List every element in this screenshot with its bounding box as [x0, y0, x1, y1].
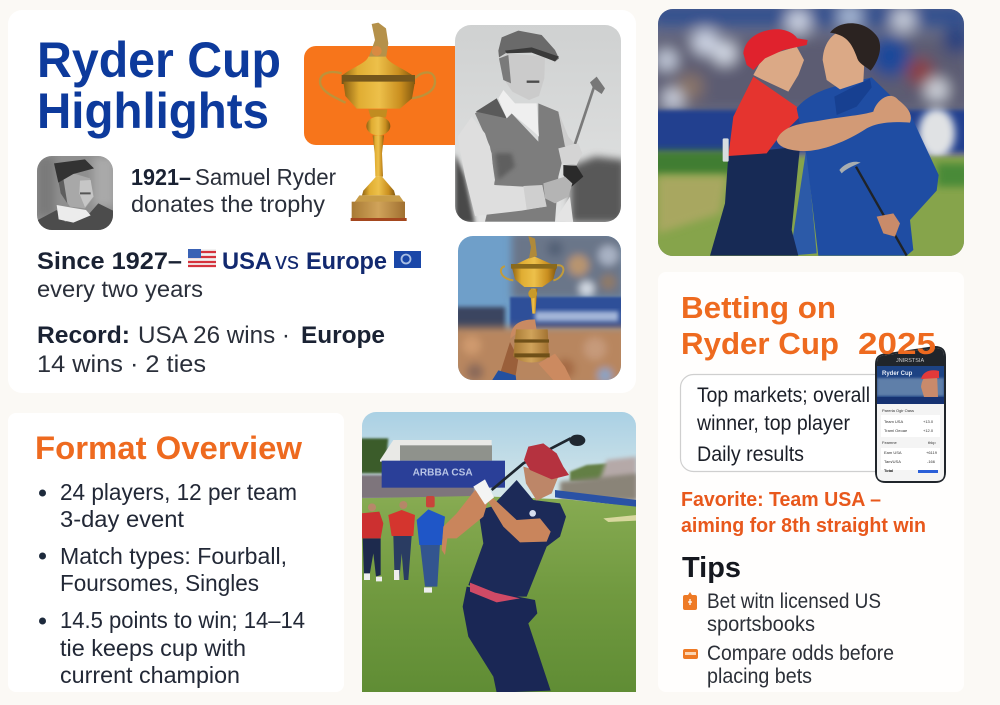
text: tip one: [707, 590, 881, 636]
icon: phone betting app: Ryder Cup: [882, 371, 913, 377]
icon: usa flag: [188, 249, 216, 267]
bullet list: current champion: [60, 662, 240, 688]
text: record: Record:: [37, 322, 130, 349]
icon: phone betting app: +13.0: [923, 419, 934, 424]
bullet list: 24 players, 12 per team: [60, 479, 297, 505]
text: since 1927: USA: [222, 248, 272, 275]
bullet list: Foursomes, Singles: [60, 570, 259, 596]
orange block behind trophy: [304, 46, 456, 145]
text: since 1927: [37, 248, 421, 302]
text: tip two: Compare odds before: [707, 642, 894, 665]
heading: format overview: Format Overview: [35, 430, 302, 466]
icon: phone betting app: Tam/USA: [884, 459, 901, 464]
icon: phone betting app: Total: [884, 468, 893, 473]
box: top markets: winner, top player: [696, 412, 850, 435]
heading: betting on ryder cup: Betting on: [681, 290, 836, 325]
box: top markets: Daily results: [697, 443, 804, 466]
text: favorite: aiming for 8th straight win: [681, 515, 926, 537]
text: since 1927: Since 1927–: [37, 248, 182, 275]
box: top markets: Top markets; overall: [697, 384, 870, 407]
icon: phone betting app: [875, 346, 946, 483]
photo: two golfers embracing: [650, 3, 970, 260]
bullet list: 14.5 points to win; 14–14: [60, 607, 305, 633]
title: [37, 32, 281, 139]
panel: format overview: [8, 413, 344, 692]
text: record: 14 wins · 2 ties: [37, 351, 206, 378]
icon: tip badge: [683, 592, 697, 610]
text: 1921: 1921–: [131, 164, 191, 190]
spectators: [362, 496, 445, 593]
icon: phone betting app: Trami Oeoae: [884, 428, 908, 433]
text: since 1927: Europe: [306, 248, 387, 275]
icon: phone betting app: thkp: [928, 440, 936, 445]
icon: samuel ryder portrait small: [37, 155, 115, 232]
portrait photo: golfer in vest: [455, 23, 625, 227]
text: record: [37, 322, 385, 378]
text: record: USA 26 wins ·: [138, 322, 290, 349]
photo: golfer swinging: [360, 410, 640, 697]
heading: betting on ryder cup: [681, 290, 839, 361]
photo: golfer swinging: ARBBA CSA: [413, 467, 473, 478]
icon: phone betting app: Eam USA: [884, 450, 902, 455]
photo: trophy held aloft: [458, 236, 621, 380]
icon: phone betting app: JNIRSTSIA: [896, 358, 924, 364]
text: record: Europe: [301, 322, 385, 349]
icon: europe flag: [394, 251, 421, 268]
text: tip one: Bet witn licensed US: [707, 590, 881, 613]
icon: phone betting app: +12.0: [923, 428, 934, 433]
bullet list: [39, 479, 305, 688]
panel: betting: [680, 296, 946, 688]
heading: tips: Tips: [682, 552, 741, 584]
panel: highlights: [8, 10, 636, 393]
icon: phone betting app: -166: [927, 459, 936, 464]
text: 1921: [131, 164, 336, 217]
bullet list: Match types: Fourball,: [60, 543, 287, 569]
bullet list: 3-day event: [60, 506, 185, 532]
icon: phone betting app: Feamne: [882, 440, 897, 445]
text: 1921: Samuel Ryder: [195, 164, 336, 190]
title: Ryder Cup: [37, 32, 281, 88]
icon: phone betting app: Team USA: [884, 419, 903, 424]
heading: 2025: 2025: [858, 326, 936, 361]
text: favorite: [681, 489, 926, 537]
title: Highlights: [37, 83, 269, 139]
text: tip one: sportsbooks: [707, 613, 815, 636]
text: 1921: donates the trophy: [131, 191, 326, 217]
text: since 1927: vs: [275, 248, 299, 275]
icon: tip card: [683, 649, 698, 659]
heading: betting on ryder cup: Ryder Cup: [681, 326, 839, 361]
box: top markets: [680, 374, 896, 472]
text: tip two: [707, 642, 894, 688]
bullet list: tie keeps cup with: [60, 635, 246, 661]
trophy: [320, 23, 435, 221]
text: tip two: placing bets: [707, 665, 812, 688]
icon: phone betting app: +6119: [926, 450, 938, 455]
icon: phone betting app: Pareria Ogir Oass: [882, 408, 914, 413]
text: favorite: Favorite: Team USA –: [681, 489, 881, 511]
text: since 1927: every two years: [37, 276, 203, 302]
